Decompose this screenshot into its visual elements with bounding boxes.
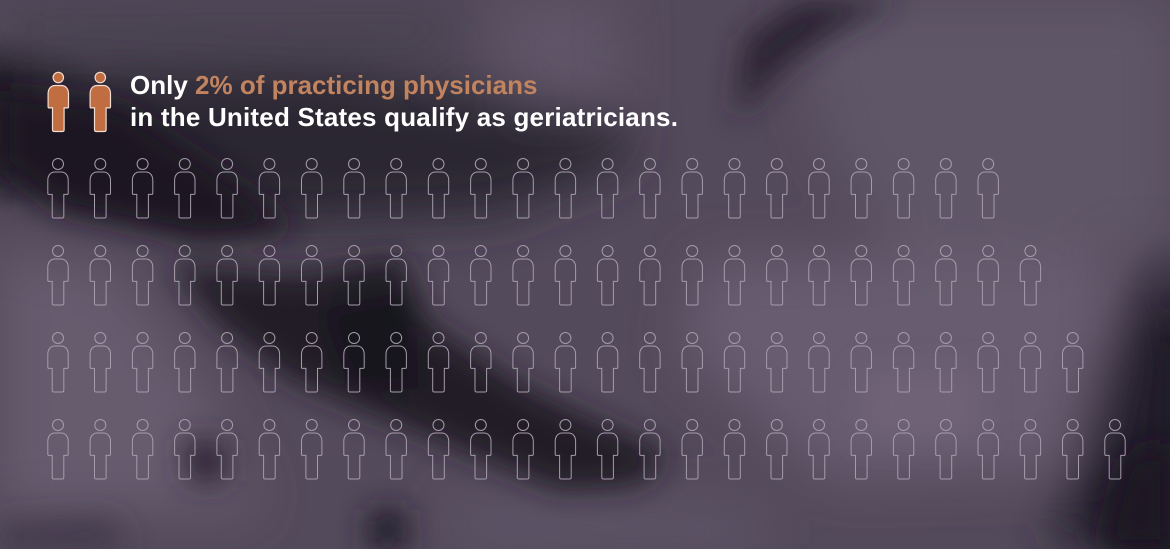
title: in the United States qualify as geriatricians. [130, 102, 678, 132]
row 2 of physicians [48, 246, 1041, 305]
row 1 of physicians [48, 158, 998, 218]
row 3 of physicians [48, 332, 1083, 392]
row 4 of physicians [48, 420, 1125, 479]
2 highlighted geriatricians [48, 72, 111, 132]
title [130, 70, 678, 132]
title: Only 2% of practicing physicians [130, 70, 537, 100]
